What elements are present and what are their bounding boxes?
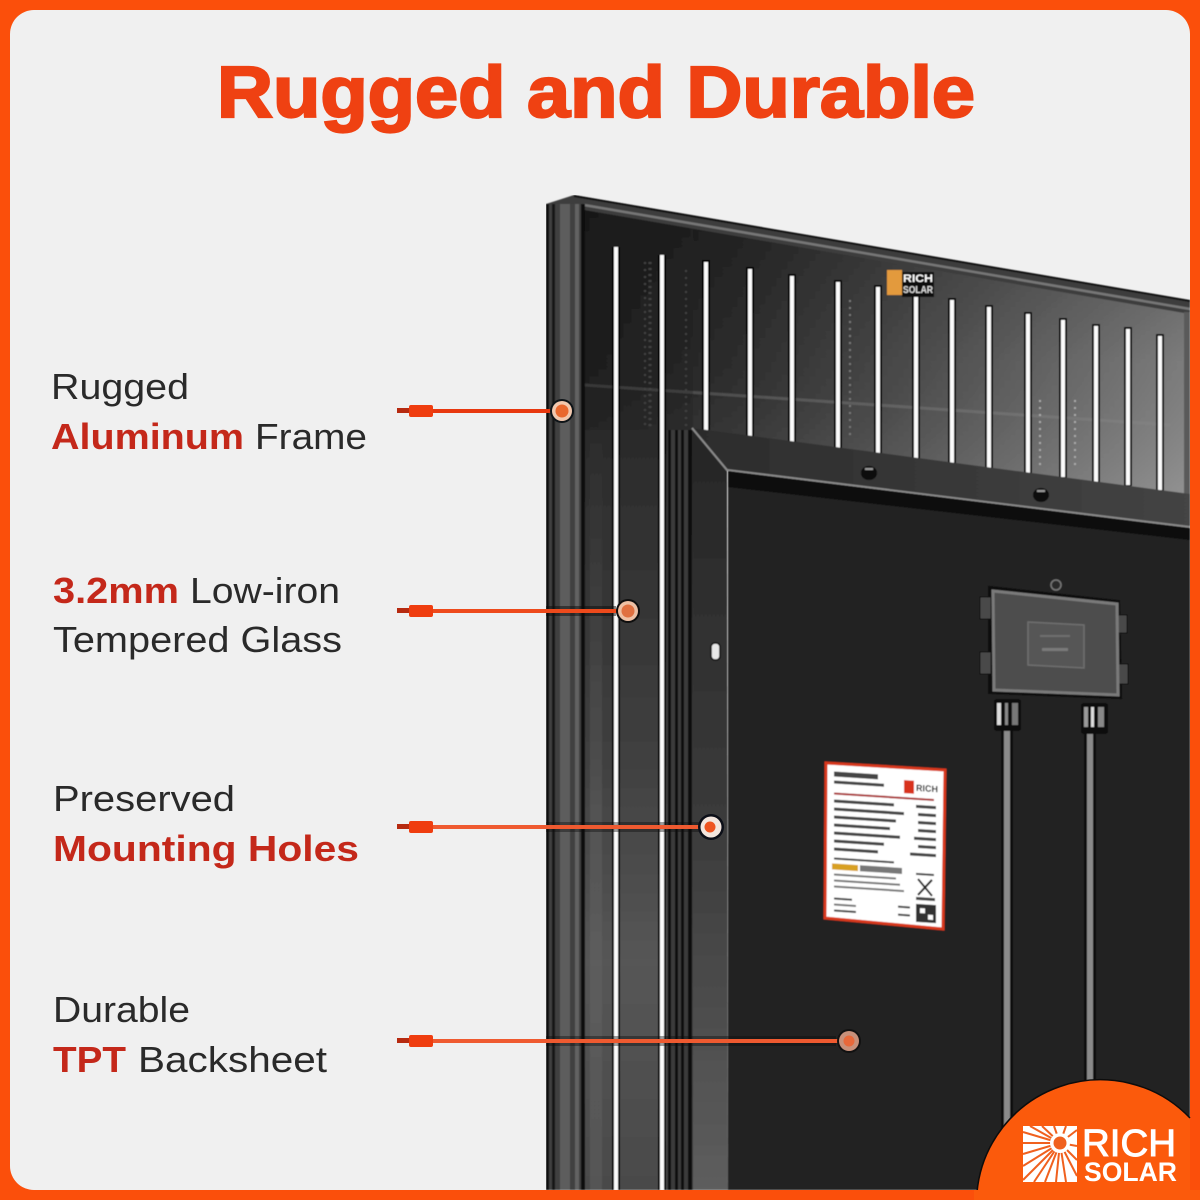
- cell stripes near back frame: [667, 430, 693, 1190]
- label: Durable TPT Backsheet: TPT: [53, 1039, 126, 1080]
- wordmark: [1082, 1123, 1177, 1187]
- side mounting slot: [711, 643, 720, 660]
- back frame crossbar: [692, 428, 1190, 527]
- label: Rugged Aluminum Frame: [51, 366, 367, 457]
- label: Rugged Aluminum Frame: Rugged: [51, 366, 189, 407]
- backsheet: [728, 471, 1190, 1190]
- label: 3.2mm Low-iron Tempered Glass: Low-iron: [190, 570, 340, 611]
- lower glass strip: [584, 430, 694, 1190]
- right border strip: [1190, 0, 1200, 1200]
- cable connectors: [994, 699, 1108, 734]
- label: 3.2mm Low-iron Tempered Glass: Tempered Glass: [53, 619, 342, 660]
- crossbar mounting holes: [861, 466, 1049, 502]
- callout: backsheet: [53, 989, 861, 1080]
- label: Durable TPT Backsheet: Durable: [53, 989, 190, 1030]
- brand mark on glass: SOLAR: [903, 285, 934, 296]
- label: Durable TPT Backsheet: [53, 989, 327, 1080]
- callout: mounting holes: [53, 778, 724, 869]
- wordmark: SOLAR: [1084, 1157, 1177, 1187]
- junction box: [980, 580, 1128, 697]
- cables: [1001, 725, 1096, 1190]
- specification label: [825, 763, 945, 929]
- callout: tempered glass: [53, 570, 640, 660]
- icon: sun: [1023, 1126, 1077, 1182]
- label: Preserved Mounting Holes: Mounting Holes: [53, 828, 359, 869]
- panel aluminum frame top rail: [546, 195, 1190, 330]
- left aluminum frame side: [546, 204, 585, 1190]
- label: Rugged Aluminum Frame: Frame: [255, 416, 367, 457]
- label: 3.2mm Low-iron Tempered Glass: 3.2mm: [53, 570, 179, 611]
- pointer line: [397, 1029, 861, 1053]
- brand mark on glass: RICH: [903, 273, 933, 285]
- pointer line: [397, 399, 574, 423]
- wordmark: RICH: [1082, 1123, 1176, 1165]
- bright cell gaps: [616, 247, 1160, 1190]
- title: Rugged and Durable: [217, 53, 975, 133]
- specification label: RICH: [916, 783, 938, 794]
- label: 3.2mm Low-iron Tempered Glass: [53, 570, 342, 660]
- label: Durable TPT Backsheet: Backsheet: [138, 1039, 327, 1080]
- brand mark on glass: [887, 270, 934, 297]
- pointer line: [397, 814, 724, 840]
- label: Rugged Aluminum Frame: Aluminum: [51, 416, 244, 457]
- pointer line: [397, 599, 640, 623]
- back frame side flange: [692, 428, 728, 1190]
- label: Preserved Mounting Holes: Preserved: [53, 778, 235, 819]
- label: Preserved Mounting Holes: [53, 778, 359, 869]
- bottom border strip: [0, 1190, 1200, 1200]
- brand logo badge: [974, 1080, 1200, 1200]
- callout: aluminum frame: [51, 366, 574, 457]
- solar panel rear view: [546, 195, 1190, 1190]
- upper glass area with cells: [584, 210, 1190, 500]
